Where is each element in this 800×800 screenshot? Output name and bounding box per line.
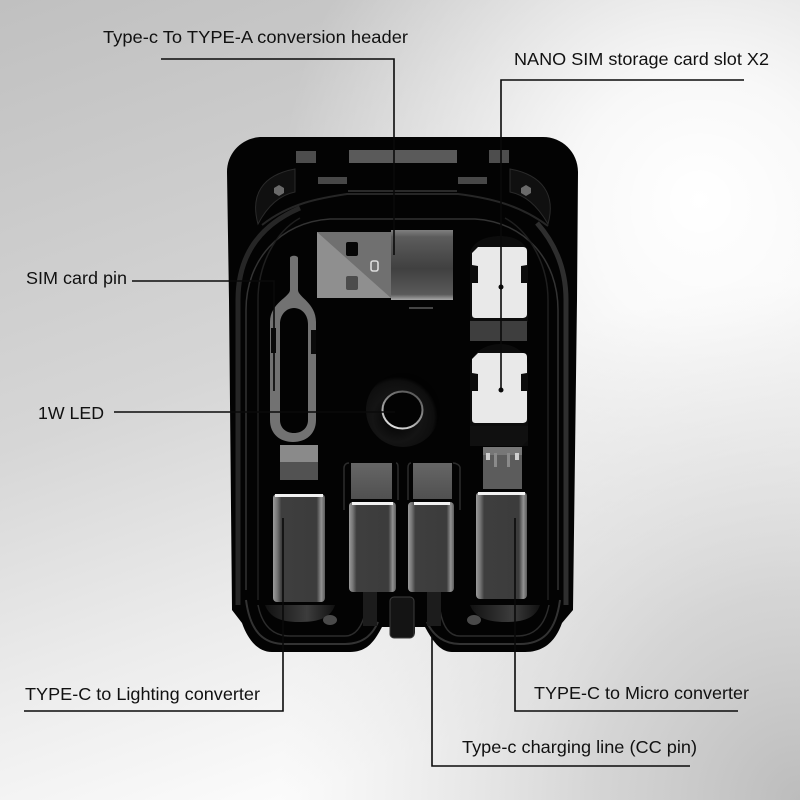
micro USB converter [467,426,540,625]
inner tray contours [238,194,566,644]
callout: NANO SIM storage card slot X2: NANO SIM storage card slot X2 [514,49,769,69]
nano SIM slot 2 [470,344,528,446]
callout: SIM card pin: SIM card pin [26,268,127,288]
callout: SIM card pin [26,268,274,330]
callout: TYPE-C to Micro converter: TYPE-C to Micro converter [534,683,749,703]
case body [227,137,578,652]
hinge clips [256,150,550,224]
callout: TYPE-C to Lighting converter: TYPE-C to Lighting converter [25,684,260,704]
type-C converter left [344,463,398,626]
product: adapter storage case [227,137,578,652]
callout: Type-c To TYPE-A conversion header: Type-c To TYPE-A conversion header [103,27,408,47]
callout: Type-c To TYPE-A conversion header [103,27,408,255]
USB type-A to type-C header [317,230,453,309]
callout: TYPE-C to Lighting converter [24,518,283,711]
callout: Type-c charging line (CC pin): Type-c charging line (CC pin) [462,737,697,757]
nano SIM slot 1 [470,236,528,341]
callout: NANO SIM storage card slot X2 [498,49,769,392]
callout: TYPE-C to Micro converter [515,518,749,711]
callout: Type-c charging line (CC pin) [432,635,697,766]
1W LED [366,373,440,447]
lightning converter [265,445,337,625]
center clip [390,597,414,638]
SIM card pin [270,256,316,442]
type-C converter right [408,463,460,626]
callout: 1W LED: 1W LED [38,403,104,423]
